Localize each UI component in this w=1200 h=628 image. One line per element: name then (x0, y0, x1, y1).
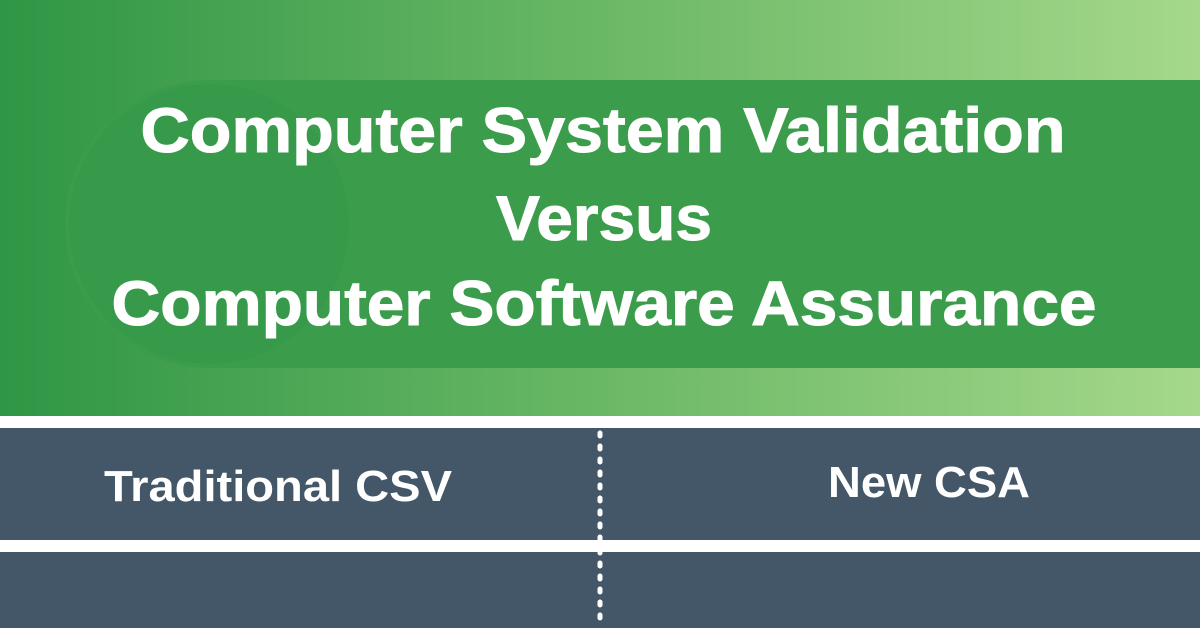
title band (65, 80, 1200, 368)
title: Computer System Validation (140, 96, 1066, 166)
title: Computer Software Assurance (112, 269, 1096, 339)
second row panel (0, 552, 1200, 628)
header background gradient (0, 0, 1200, 416)
header row panel (0, 428, 1200, 540)
dotted divider (598, 433, 602, 628)
column heading: New CSA: New CSA (828, 458, 1030, 507)
column heading: Traditional CSV: Traditional CSV (104, 462, 453, 511)
title: Versus (496, 184, 712, 254)
title (112, 96, 1096, 339)
